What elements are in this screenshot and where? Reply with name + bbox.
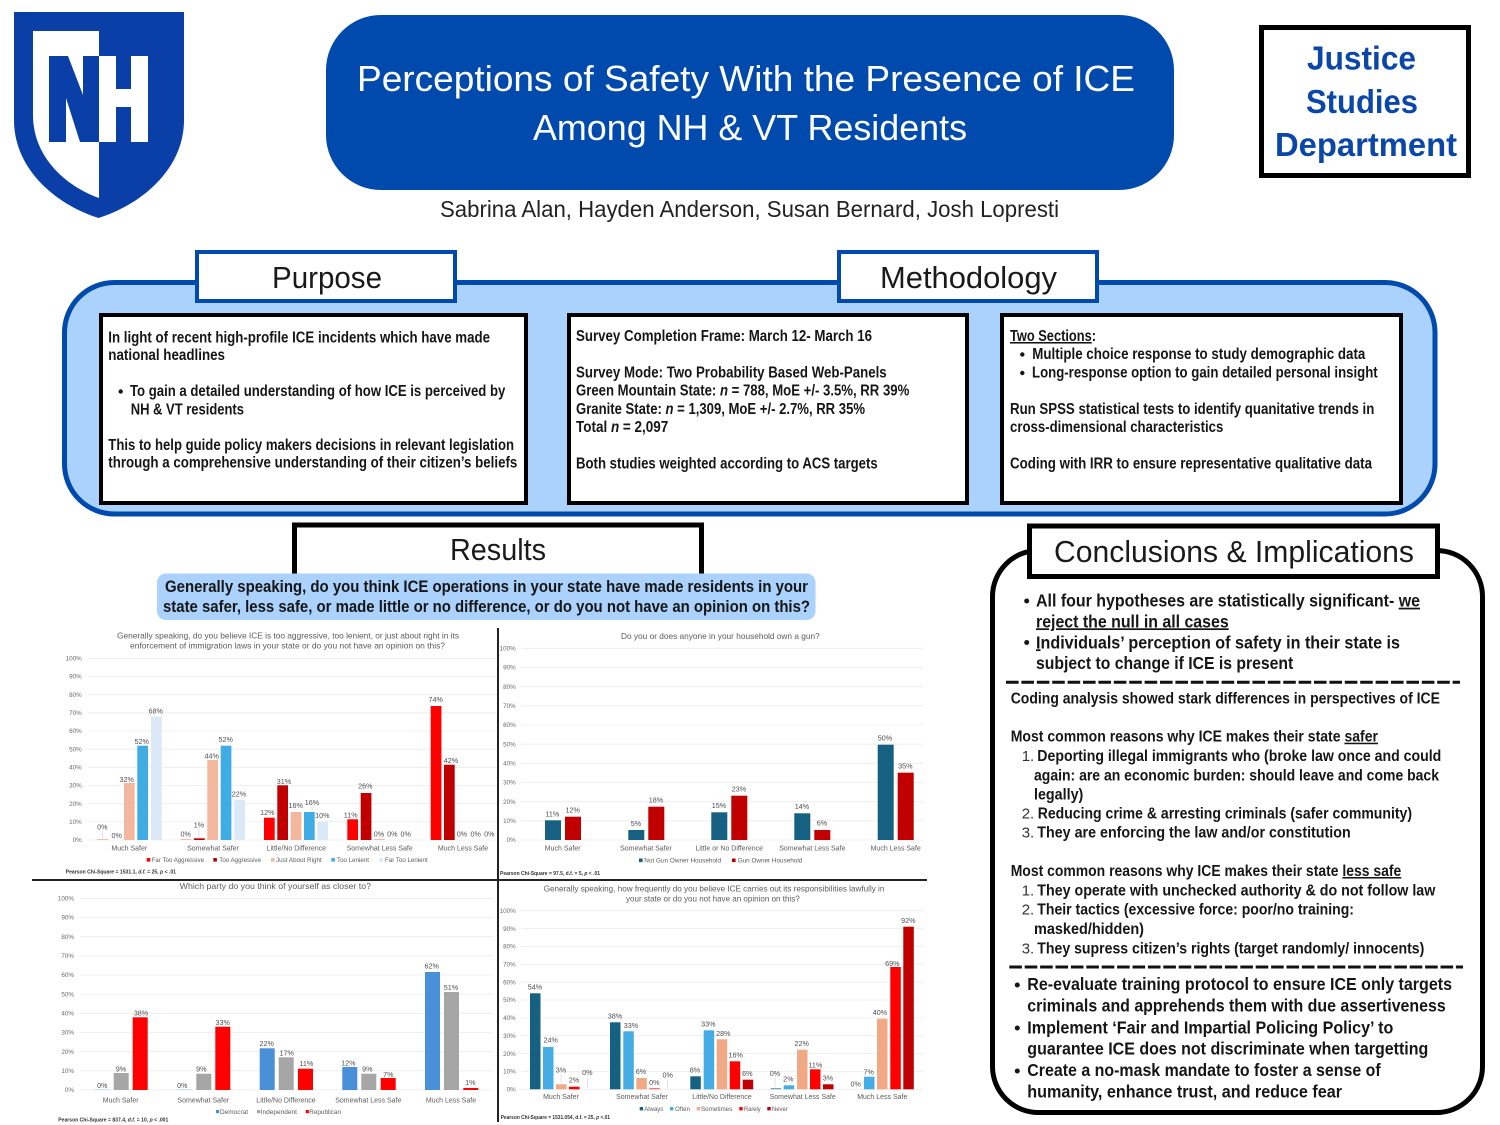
y axis labels: 20% [503, 799, 516, 806]
y axis labels: 100% [500, 646, 516, 652]
value labels: 0% [851, 1080, 862, 1088]
bars [545, 745, 914, 840]
value labels: 22% [260, 1039, 274, 1048]
value labels: 1% [194, 820, 205, 830]
value labels: 22% [795, 1039, 809, 1048]
category labels: Much Safer [545, 846, 581, 853]
text: coding analysis: masked/hidden) [1034, 921, 1144, 938]
text box: purpose: To gain a detailed understanding of how ICE is perceived by [130, 383, 506, 400]
text: policy implications: Create a no-mask mandate to foster a sense of [1027, 1060, 1381, 1080]
value labels [97, 962, 476, 1090]
category labels [111, 846, 488, 853]
value labels: 3% [556, 1066, 567, 1074]
category labels: Much Safer [103, 1097, 139, 1104]
value labels: 38% [134, 1008, 149, 1018]
text: coding analysis: They supress citizen’s rights (target randomly/ innocents) [1037, 940, 1424, 957]
y axis labels: 90% [61, 915, 74, 922]
y axis labels: 90% [503, 926, 516, 933]
category labels: Little or No Difference [696, 846, 763, 853]
value labels: 6% [636, 1067, 647, 1076]
text: policy implications: Implement ‘Fair and Impartial Policing Policy’ to [1027, 1017, 1393, 1037]
callout: overall survey question [157, 574, 816, 620]
legend: Rarely [744, 1106, 761, 1113]
chart title [544, 884, 885, 904]
value labels: 54% [528, 982, 543, 992]
text box: two sections: cross-dimensional characteristics [1010, 419, 1223, 436]
panel: conclusions and implications [992, 526, 1482, 1112]
department box: Studies [1306, 83, 1418, 120]
category labels: Little/No Difference [692, 1094, 752, 1101]
value labels: 15% [712, 801, 727, 810]
y axis labels: 20% [69, 801, 82, 808]
text: coding analysis: 1. [1022, 748, 1034, 765]
y axis labels: 70% [69, 710, 82, 717]
y axis labels: 40% [503, 760, 516, 768]
value labels: 16% [305, 798, 320, 807]
value labels: 92% [901, 916, 916, 925]
value labels: 0% [387, 830, 398, 838]
y axis labels: 90% [69, 674, 82, 681]
value labels: 0% [97, 822, 108, 832]
y axis labels: 60% [503, 722, 516, 729]
y axis labels: 10% [503, 818, 516, 825]
value labels: 33% [216, 1018, 230, 1027]
category labels [103, 1097, 476, 1104]
value labels: 24% [544, 1036, 558, 1044]
value labels: 0% [484, 830, 495, 838]
y axis labels: 30% [61, 1030, 74, 1037]
y axis labels: 60% [61, 972, 74, 979]
y axis labels: 10% [503, 1069, 516, 1076]
authors: Sabrina Alan, Hayden Anderson, Susan Bernard, Josh Lopresti [440, 196, 1059, 222]
value labels: 26% [358, 782, 373, 790]
y axis labels: 30% [69, 783, 82, 790]
text: policy implications: humanity, enhance trust, and reduce fear [1027, 1082, 1342, 1102]
text box: survey details: Survey Completion Frame: March 12- March 16 [576, 328, 872, 345]
chart title: Do you or does anyone in your household own a gun? [621, 631, 820, 641]
icon: UNH shield logo [14, 12, 184, 218]
y axis labels: 0% [507, 1086, 516, 1094]
heading: conclusions and implications [1030, 526, 1438, 576]
text box: survey details: Total n = 2,097 [576, 419, 668, 436]
value labels: 42% [444, 756, 459, 765]
y axis labels: 80% [503, 684, 516, 691]
text box: two sections: Multiple choice response to study demographic data [1032, 346, 1366, 363]
heading: purpose [197, 252, 455, 301]
value labels: 51% [444, 983, 459, 992]
text: coding analysis: 2. [1022, 805, 1034, 822]
y axis labels: 20% [503, 1051, 516, 1058]
legend: Often [675, 1106, 690, 1113]
department box [1262, 28, 1468, 176]
text box: purpose: national headlines [108, 347, 225, 364]
legend: Sometimes [701, 1106, 733, 1113]
legend: Independent [261, 1109, 297, 1116]
y axis labels: 40% [503, 1015, 516, 1022]
legend: Too Lenient [337, 857, 369, 864]
chart: too aggressive or too lenient [66, 630, 497, 876]
value labels: 0% [374, 830, 385, 838]
value labels: 0% [471, 830, 482, 838]
value labels: 68% [149, 706, 163, 716]
value labels: 9% [362, 1064, 373, 1074]
y axis labels [500, 908, 516, 1094]
value labels: 7% [383, 1070, 394, 1079]
text box: two sections: Long-response option to gain detailed personal insight [1032, 365, 1378, 382]
value labels: 32% [120, 775, 134, 784]
y axis labels: 10% [61, 1068, 74, 1075]
text: coding analysis: They are enforcing the law and/or constitution [1037, 824, 1351, 841]
value labels: 16% [289, 801, 303, 810]
text box: two sections: Two Sections: [1010, 328, 1096, 345]
value labels: 14% [795, 802, 810, 811]
text: coding analysis: Most common reasons why ICE makes their state less safe [1011, 863, 1402, 880]
y axis labels: 70% [61, 953, 74, 960]
legend: Far Too Lenient [385, 857, 428, 864]
y axis labels: 80% [61, 934, 74, 941]
y axis labels: 50% [69, 746, 82, 753]
category labels: Much Less Safe [871, 846, 921, 853]
value labels: 0% [401, 830, 412, 838]
category labels: Much Less Safe [857, 1094, 907, 1101]
y axis labels: 50% [61, 991, 74, 998]
text: coding analysis [1011, 690, 1441, 957]
category labels: Somewhat Safer [187, 846, 240, 853]
value labels: 52% [219, 735, 233, 744]
legend: Too Aggressive [219, 857, 261, 864]
chart: how often ICE acts lawfully [500, 884, 923, 1121]
category labels: Somewhat Less Safe [779, 846, 845, 853]
value labels: 11% [545, 810, 560, 818]
value labels: 38% [608, 1012, 623, 1020]
chart: party affiliation [58, 881, 493, 1124]
title banner: Perceptions of Safety With the Presence of ICE [357, 58, 1135, 99]
y axis labels: 80% [69, 692, 82, 699]
text box: two sections: Coding with IRR to ensure representative qualitative data [1010, 456, 1372, 473]
value labels: 0% [457, 830, 468, 838]
value labels: 17% [280, 1048, 294, 1058]
bars [94, 972, 478, 1090]
text box: two sections [1002, 315, 1401, 503]
category labels: Somewhat Safer [620, 846, 673, 853]
text: coding analysis: Deporting illegal immigrants who (broke law once and could [1037, 748, 1441, 765]
text: coding analysis: Coding analysis showed stark differences in perspectives of ICE [1011, 690, 1440, 707]
category labels: Much Safer [111, 846, 148, 853]
value labels [97, 695, 495, 840]
text box: two sections: Run SPSS statistical tests to identify quanitative trends in [1010, 401, 1374, 418]
statistics note: Pearson Chi-Square = 1531.1, d.f. = 25, p < .01 [66, 870, 176, 876]
heading: purpose: Purpose [272, 260, 382, 295]
y axis labels: 0% [507, 837, 516, 844]
y axis labels: 0% [73, 837, 82, 844]
value labels: 44% [205, 752, 219, 760]
category labels: Much Safer [543, 1094, 580, 1101]
y axis labels [500, 646, 516, 844]
value labels: 0% [582, 1068, 593, 1077]
legend [640, 1106, 788, 1113]
y axis labels: 100% [500, 908, 516, 915]
value labels: 16% [729, 1050, 743, 1060]
value labels: 5% [631, 819, 642, 828]
text: main findings [1024, 591, 1420, 673]
chart title: Which party do you think of yourself as closer to? [180, 881, 371, 891]
legend: Just About Right [276, 857, 322, 864]
value labels: 0% [663, 1070, 674, 1080]
value labels: 9% [196, 1064, 207, 1074]
legend [216, 1109, 341, 1116]
y axis labels: 0% [65, 1087, 74, 1094]
text: coding analysis: 3. [1022, 940, 1034, 957]
y axis labels: 60% [503, 979, 516, 986]
value labels: 69% [885, 959, 900, 968]
text box: purpose: In light of recent high-profile ICE incidents which have made [108, 330, 490, 347]
legend: Democrat [220, 1109, 248, 1116]
text box: purpose: through a comprehensive understanding of their citizen’s beliefs [108, 455, 517, 472]
text: main findings: All four hypotheses are statistically significant- we [1036, 591, 1420, 611]
value labels: 40% [873, 1008, 888, 1017]
value labels: 8% [690, 1066, 701, 1074]
category labels: Somewhat Less Safe [770, 1094, 836, 1101]
category labels: Somewhat Less Safe [335, 1097, 401, 1104]
value labels: 0% [177, 1081, 188, 1090]
category labels: Little/No Difference [267, 846, 326, 853]
text: coding analysis: legally) [1034, 786, 1083, 803]
text box: survey details: Green Mountain State: n = 788, MoE +/- 3.5%, RR 39% [576, 383, 909, 400]
value labels: 11% [299, 1059, 314, 1068]
statistics note: Pearson Chi-Square = 1531.054, d.f. = 25, p <.01 [501, 1115, 610, 1121]
text: main findings: Individuals’ perception of safety in their state is [1036, 632, 1400, 652]
value labels: 12% [260, 808, 275, 817]
text: coding analysis: Most common reasons why ICE makes their state safer [1011, 729, 1378, 746]
legend: Republican [309, 1109, 341, 1116]
text: main findings: reject the null in all cases [1036, 611, 1229, 631]
value labels: 23% [732, 784, 747, 794]
value labels: 0% [181, 830, 192, 838]
value labels [528, 916, 916, 1088]
legend: Gun Owner Household [738, 858, 803, 865]
heading: results [294, 525, 702, 585]
text: coding analysis: 3. [1022, 824, 1034, 841]
value labels [545, 734, 913, 828]
y axis labels: 70% [503, 962, 516, 968]
text box: purpose: This to help guide policy makers decisions in relevant legislation [108, 437, 514, 454]
bars [97, 706, 455, 840]
text: coding analysis: 2. [1022, 902, 1034, 919]
value labels: 12% [341, 1058, 356, 1068]
value labels: 52% [135, 737, 149, 746]
text: policy implications: guarantee ICE does not discriminate when targetting [1027, 1039, 1428, 1059]
y axis labels: 60% [69, 728, 82, 735]
category labels: Much Less Safe [426, 1097, 476, 1104]
panel: purpose and methodology [64, 252, 1435, 514]
heading: methodology [839, 252, 1097, 301]
y axis labels: 30% [503, 780, 516, 787]
value labels: 22% [232, 790, 247, 798]
y axis labels: 100% [66, 656, 82, 662]
legend: Never [772, 1106, 788, 1113]
text: coding analysis: 1. [1022, 882, 1034, 899]
heading: methodology: Methodology [880, 260, 1057, 295]
legend: Not Gun Owner Household [644, 858, 721, 865]
y axis labels: 50% [503, 741, 516, 748]
value labels: 0% [97, 1081, 108, 1090]
value labels: 31% [277, 777, 292, 786]
title banner: Among NH & VT Residents [533, 107, 967, 148]
callout: overall survey question: Generally speaking, do you think ICE operations in your state have made residents in your [165, 578, 809, 596]
category labels: Much Less Safe [438, 846, 488, 853]
chart: household gun ownership [500, 631, 923, 877]
value labels: 2% [569, 1076, 580, 1084]
text box: survey details: Both studies weighted according to ACS targets [576, 456, 878, 473]
category labels: Little/No Difference [256, 1097, 316, 1104]
title banner [326, 15, 1174, 190]
text box: survey details: Survey Mode: Two Probability Based Web-Panels [576, 365, 887, 382]
value labels: 33% [701, 1020, 716, 1028]
legend: Far Too Aggressive [152, 857, 204, 864]
y axis labels: 20% [61, 1049, 74, 1056]
text: policy implications: Re-evaluate training protocol to ensure ICE only targets [1027, 974, 1452, 994]
category labels [545, 846, 921, 853]
text: coding analysis: Reducing crime & arresting criminals (safer community) [1038, 805, 1412, 822]
value labels: 6% [742, 1069, 753, 1078]
value labels: 62% [425, 962, 439, 970]
value labels: 0% [112, 831, 123, 840]
y axis labels: 10% [69, 819, 82, 826]
category labels [543, 1094, 907, 1101]
statistics note: Pearson Chi-Square = 837.4, d.f. = 10, p < .001 [58, 1118, 169, 1124]
y axis labels: 40% [61, 1010, 74, 1018]
category labels: Somewhat Safer [616, 1094, 669, 1101]
statistics note: Pearson Chi-Square = 97.5, d.f. = 5, p < .01 [500, 871, 600, 877]
y axis labels: 100% [58, 896, 74, 902]
y axis labels: 80% [503, 944, 516, 951]
y axis labels: 40% [69, 764, 82, 772]
value labels: 0% [770, 1069, 781, 1078]
category labels: Somewhat Less Safe [347, 846, 413, 853]
text box: purpose [101, 315, 526, 503]
value labels: 35% [898, 762, 913, 770]
legend: Always [644, 1106, 664, 1113]
text: coding analysis: They operate with unchecked authority & do not follow law [1037, 882, 1436, 899]
value labels: 33% [624, 1021, 639, 1030]
department box: Justice [1307, 40, 1416, 76]
heading: conclusions and implications: Conclusions & Implications [1054, 534, 1414, 569]
callout: overall survey question: state safer, less safe, or made little or no difference, or do you not have an opinion on this? [163, 598, 810, 616]
y axis labels [66, 656, 82, 844]
department box: Department [1275, 126, 1457, 163]
y axis labels: 50% [503, 997, 516, 1004]
chart title [117, 630, 459, 650]
text: main findings: subject to change if ICE is present [1036, 653, 1293, 673]
legend [147, 857, 428, 864]
value labels: 11% [344, 810, 358, 820]
y axis labels: 30% [503, 1033, 516, 1040]
value labels: 74% [429, 695, 443, 704]
y axis labels: 70% [503, 703, 516, 710]
text box: survey details: Granite State: n = 1,309, MoE +/- 2.7%, RR 35% [576, 401, 865, 418]
text: policy implications: criminals and apprehends them with due assertiveness [1027, 996, 1446, 1016]
chart title: Generally speaking, do you believe ICE is too aggressive, too lenient, or just about right in its [117, 630, 459, 640]
category labels: Somewhat Safer [177, 1097, 230, 1104]
value labels: 9% [116, 1064, 127, 1074]
legend [639, 858, 803, 865]
value labels: 11% [808, 1060, 823, 1070]
value labels: 50% [878, 734, 893, 742]
value labels: 12% [566, 806, 580, 814]
chart title: Generally speaking, how frequently do you believe ICE carries out its responsibilities lawfully in [544, 884, 885, 894]
text box: purpose: NH & VT residents [131, 401, 244, 418]
text: coding analysis: Their tactics (excessive force: poor/no training: [1037, 902, 1354, 919]
text box: survey details [569, 315, 967, 503]
value labels: 10% [315, 811, 330, 820]
text: policy implications [1015, 974, 1452, 1102]
value labels: 18% [649, 796, 664, 804]
value labels: 2% [783, 1074, 794, 1084]
bars [530, 927, 914, 1089]
y axis labels: 90% [503, 665, 516, 672]
chart title: your state or do you not have an opinion on this? [626, 894, 800, 904]
text: coding analysis: again: are an economic burden: should leave and come back [1034, 767, 1439, 784]
value labels: 7% [864, 1068, 875, 1076]
value labels: 28% [716, 1029, 731, 1038]
heading: results: Results [450, 532, 546, 567]
value labels: 0% [649, 1078, 660, 1087]
value labels: 1% [465, 1078, 476, 1087]
value labels: 3% [823, 1074, 834, 1082]
chart title: enforcement of immigration laws in your state or do you not have an opinion on this? [130, 640, 445, 650]
y axis labels [58, 896, 74, 1094]
value labels: 6% [817, 818, 828, 828]
